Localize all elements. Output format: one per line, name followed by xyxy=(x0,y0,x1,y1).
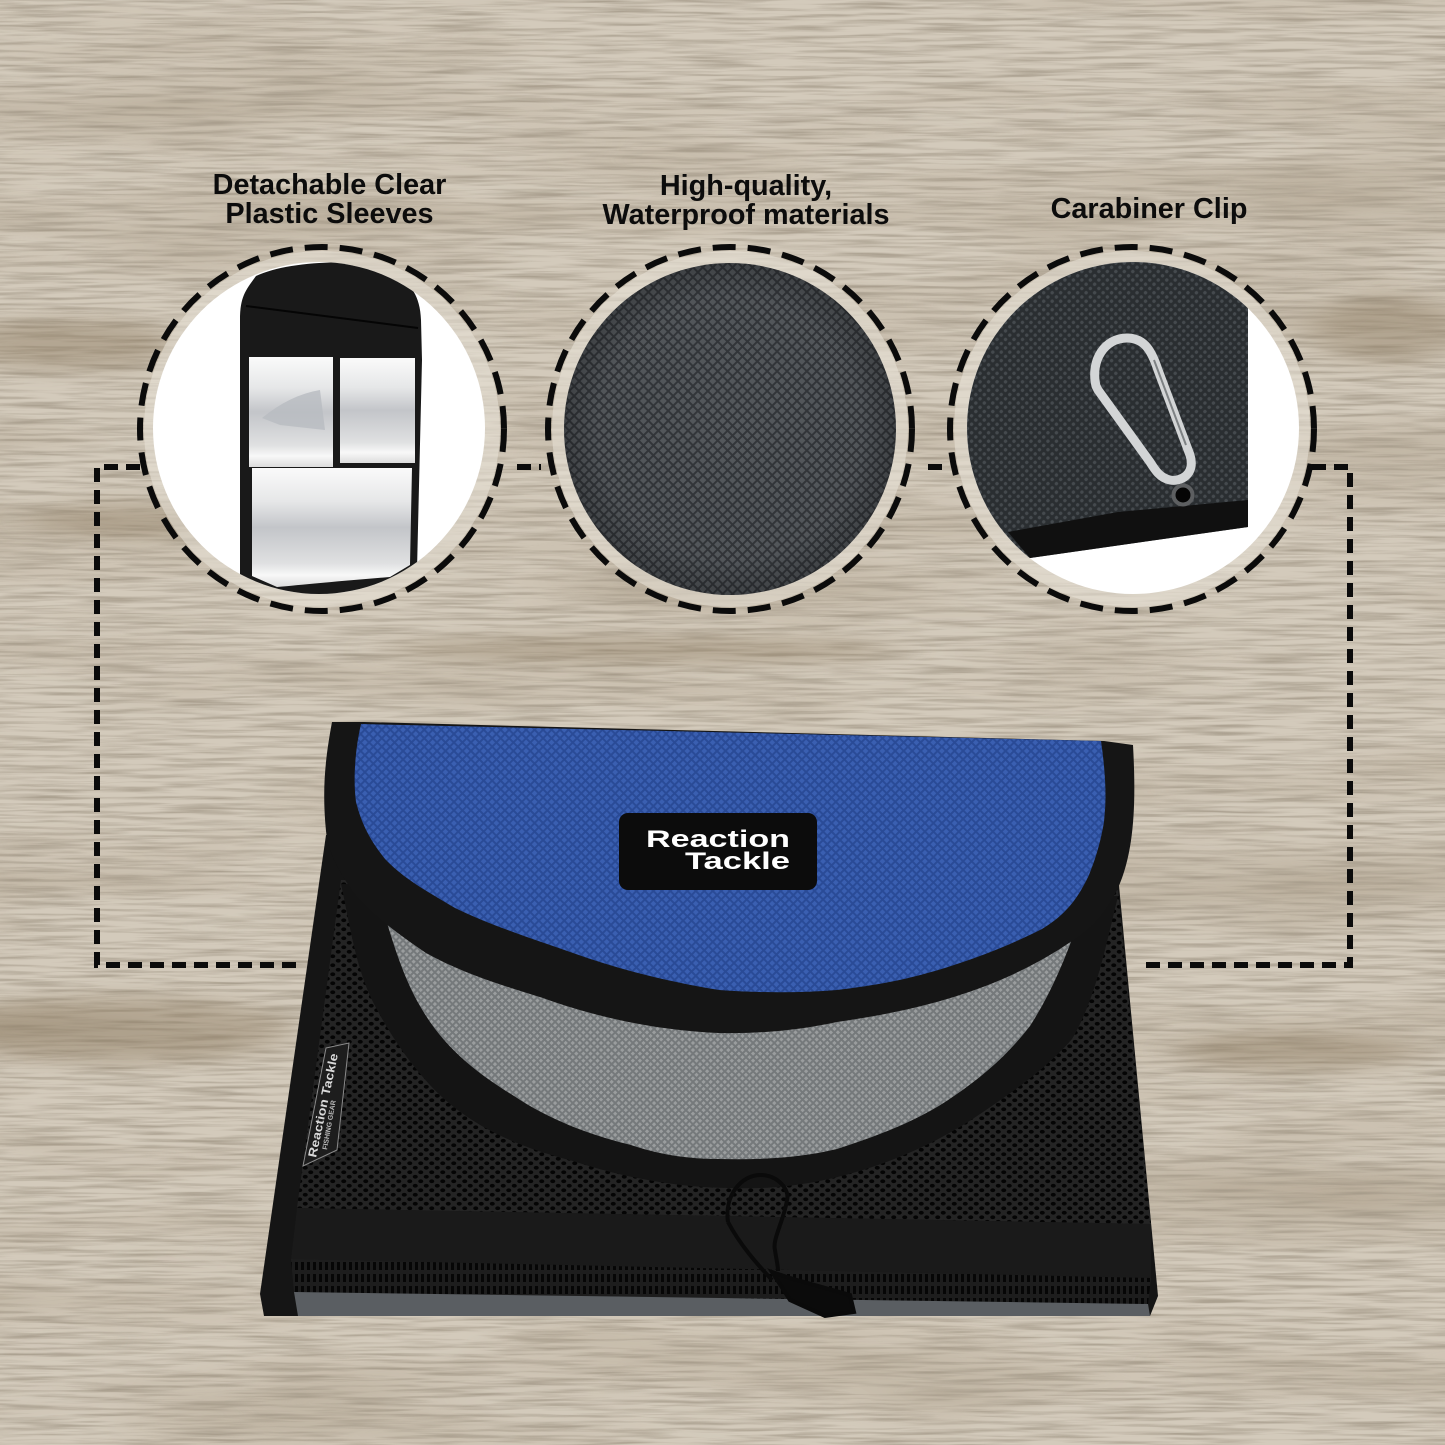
heading: detachable sleeves: Detachable Clear xyxy=(213,169,446,201)
heading: detachable sleeves: Plastic Sleeves xyxy=(225,198,434,230)
open bag xyxy=(240,262,422,600)
heading: carabiner clip: Carabiner Clip xyxy=(1051,193,1247,225)
circle: plastic sleeves xyxy=(140,247,504,611)
side label: FISHING GEAR xyxy=(322,1100,338,1150)
webbing strap xyxy=(291,1208,1151,1278)
grey inner panel xyxy=(385,900,1077,1159)
logo patch: Tackle xyxy=(685,848,790,875)
side label xyxy=(303,1043,349,1166)
elastic cord and zipper pull xyxy=(727,1175,854,1316)
heading: waterproof materials: Waterproof materials xyxy=(603,199,889,231)
side label: Reaction Tackle xyxy=(305,1052,341,1159)
bag body xyxy=(260,835,1158,1316)
zipper xyxy=(291,1259,1151,1304)
logo patch: Reaction xyxy=(646,826,790,853)
circle: woven material xyxy=(548,247,912,611)
blue flap xyxy=(355,724,1106,992)
logo patch xyxy=(619,813,817,890)
pocket binding xyxy=(341,884,1118,1188)
mesh pocket xyxy=(297,880,1151,1224)
circle: carabiner clip xyxy=(950,247,1314,611)
dashed connector line xyxy=(97,467,1350,965)
carabiner xyxy=(1095,338,1191,480)
flap binding xyxy=(324,722,1134,1033)
heading: waterproof materials: High-quality, xyxy=(660,170,832,202)
product: tackle bag xyxy=(260,722,1158,1316)
